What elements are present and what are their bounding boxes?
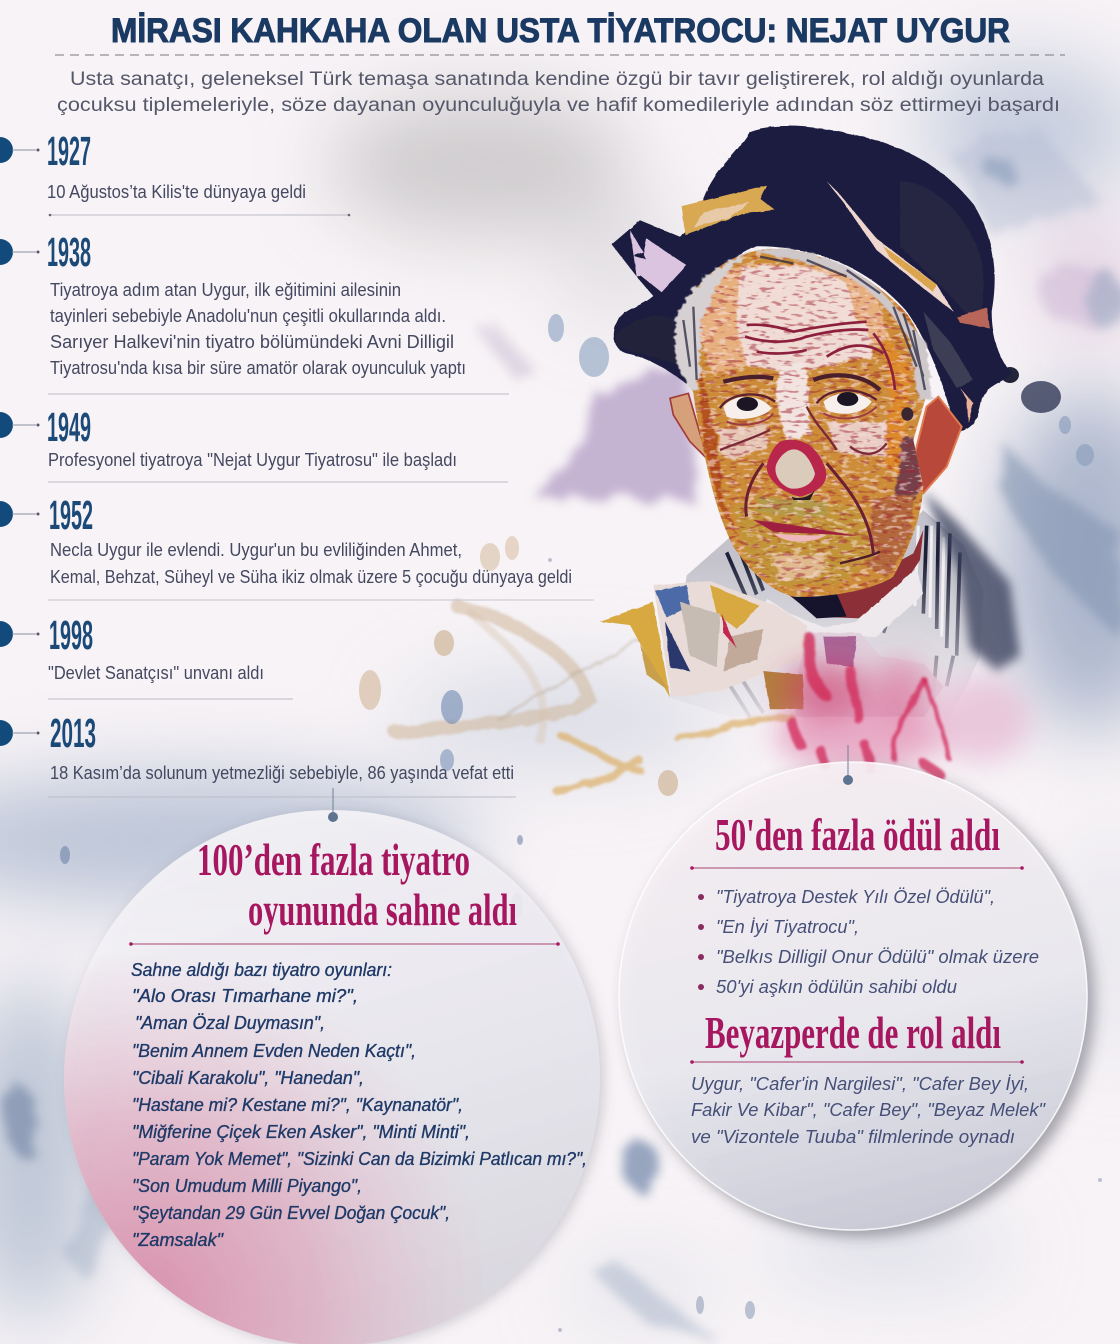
list of plays: "Son Umudum Milli Piyango", <box>132 1176 362 1196</box>
mole <box>901 407 913 421</box>
shirt <box>670 491 1020 717</box>
pink and crimson ink splash <box>775 640 1030 775</box>
film text: Fakir Ve Kibar", "Cafer Bey", "Beyaz Melek" <box>691 1100 1047 1120</box>
hair <box>673 249 932 402</box>
timeline entry 1938: Tiyatroya adım atan Uygur, ilk eğitimini ailesinin <box>50 280 401 300</box>
timeline entry 1927: 10 Ağustos’ta Kilis'te dünyaya geldi <box>47 182 306 202</box>
awards list <box>698 887 1039 997</box>
connector dot <box>843 745 853 785</box>
heading: plays: oyununda sahne aldı <box>248 885 517 935</box>
timeline entry 2013: 2013 <box>50 710 96 756</box>
timeline entry 1952: Necla Uygur ile evlendi. Uygur'un bu evliliğinden Ahmet, <box>50 540 462 560</box>
intro text: çocuksu tiplemeleriyle, söze dayanan oyunculuğuyla ve hafif komedileriyle adından söz ettirmeyi başardı <box>57 95 1060 116</box>
heading: awards: 50'den fazla ödül aldı <box>715 810 1000 860</box>
title: MİRASI KAHKAHA OLAN USTA TİYATROCU: NEJAT UYGUR <box>111 12 1010 50</box>
list of plays: Sahne aldığı bazı tiyatro oyunları: <box>131 960 392 980</box>
timeline entry 1952 <box>0 492 594 600</box>
heading: plays: 100’den fazla tiyatro <box>197 835 470 885</box>
awards list: "Belkıs Dilligil Onur Ödülü" olmak üzere <box>716 947 1039 967</box>
timeline entry 1938: Tiyatrosu'nda kısa bir süre amatör olarak oyunculuk yaptı <box>50 358 466 378</box>
crease <box>746 463 873 553</box>
list of plays: "Miğferine Çiçek Eken Asker", "Minti Minti", <box>132 1122 470 1142</box>
timeline entry 1938: Sarıyer Halkevi'nin tiyatro bölümündeki Avni Dilligil <box>50 332 454 352</box>
timeline entry 1952: Kemal, Behzat, Süheyl ve Süha ikiz olmak üzere 5 çocuğu dünyaya geldi <box>50 567 572 587</box>
list of plays: "Benim Annem Evden Neden Kaçtı", <box>132 1041 416 1061</box>
film text <box>691 1074 1047 1147</box>
list of plays: "Hastane mi? Kestane mi?", "Kaynanatör", <box>132 1095 463 1115</box>
list of plays: "Alo Orası Tımarhane mi?", <box>132 986 358 1006</box>
intro text: Usta sanatçı, geleneksel Türk temaşa sanatında kendine özgü bir tavır geliştirerek, rol aldığı oyunlarda <box>70 69 1044 90</box>
timeline entry 1949: 1949 <box>47 404 91 450</box>
wrinkles <box>745 322 895 390</box>
timeline entry 1998 <box>0 612 293 699</box>
face <box>670 243 962 618</box>
awards list: 50'yi aşkın ödülün sahibi oldu <box>716 977 957 997</box>
heading: plays <box>197 835 517 935</box>
shirt collar and bow tie <box>600 568 943 717</box>
awards list: "Tiyatroya Destek Yılı Özel Ödülü", <box>716 887 995 907</box>
film text: Uygur, "Cafer'in Nargilesi", "Cafer Bey İyi, <box>691 1074 1029 1094</box>
list of plays: "Şeytandan 29 Gün Evvel Doğan Çocuk", <box>132 1203 450 1223</box>
timeline entry 1927: 1927 <box>47 128 91 174</box>
mouth <box>753 520 857 536</box>
title divider <box>55 54 1065 56</box>
timeline entry 1949 <box>0 404 508 482</box>
timeline entry 1998: "Devlet Sanatçısı" unvanı aldı <box>48 663 264 683</box>
neck <box>787 530 923 618</box>
panel: plays circle <box>64 788 600 1344</box>
timeline entry 1938 <box>0 229 509 394</box>
timeline entry 1938: tayinleri sebebiyle Anadolu'nun çeşitli okullarında aldı. <box>50 306 446 326</box>
timeline entry 2013: 18 Kasım’da solunum yetmezliği sebebiyle, 86 yaşında vefat etti <box>50 763 514 783</box>
timeline entry 1949: Profesyonel tiyatroya "Nejat Uygur Tiyatrosu" ile başladı <box>48 450 457 470</box>
timeline entry 1998: 1998 <box>49 612 93 658</box>
connector dot <box>328 788 338 822</box>
list of plays <box>131 960 587 1250</box>
portrait of Nejat Uygur <box>600 126 1020 717</box>
timeline entry 1938: 1938 <box>47 229 91 275</box>
face base <box>679 249 927 597</box>
list of plays: "Param Yok Memet", "Sizinki Can da Bizimki Patlıcan mı?", <box>132 1149 587 1169</box>
film text: ve "Vizontele Tuuba" filmlerinde oynadı <box>691 1127 1015 1147</box>
tan and gold brush strokes <box>395 606 790 790</box>
hat <box>612 126 1012 432</box>
list of plays: "Aman Özal Duymasın", <box>135 1013 325 1033</box>
timeline entry 1952: 1952 <box>49 492 93 538</box>
timeline entry 1927 <box>0 128 350 216</box>
intro text <box>57 69 1060 116</box>
list of plays: "Cibali Karakolu", "Hanedan", <box>132 1068 364 1088</box>
eyes <box>723 397 772 419</box>
nose <box>767 440 826 497</box>
awards list: "En İyi Tiyatrocu", <box>716 917 859 937</box>
timeline <box>0 128 594 797</box>
timeline entry 2013 <box>0 710 516 797</box>
ears <box>670 393 708 460</box>
panel: awards and film circle <box>619 745 1087 1230</box>
list of plays: "Zamsalak" <box>132 1230 225 1250</box>
